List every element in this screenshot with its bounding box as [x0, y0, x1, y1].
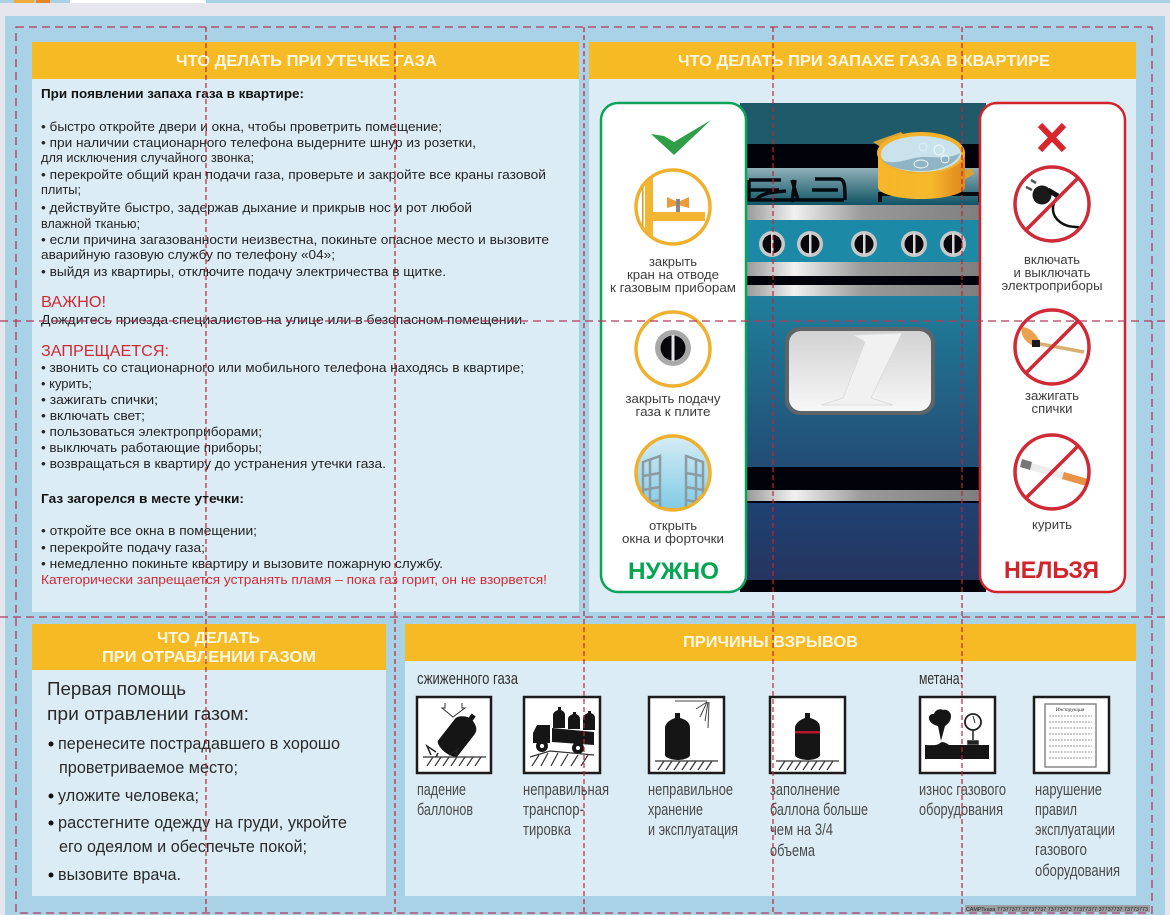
icon: stove knob [636, 312, 710, 386]
text block: important: Дождитесь приезда специалистов на улице или в безопасном помещении. [41, 312, 526, 327]
text block: first aid: уложите человека; [58, 787, 199, 805]
label: overfilling: объема [770, 841, 815, 860]
knobs [759, 231, 966, 257]
text block: forbidden: • включать свет; [41, 408, 145, 423]
icon: worn gas equipment [920, 697, 995, 773]
text block: first aid [47, 678, 347, 884]
label: worn equipment: износ газового [919, 780, 1006, 799]
icon: no smoking [1015, 435, 1089, 509]
label: worn equipment [919, 780, 1006, 819]
label: worn equipment: оборудования [919, 800, 1003, 819]
label: rule violation [1035, 780, 1120, 880]
label: falling cylinders: баллонов [417, 800, 473, 819]
label: electric appliances: и выключать [1014, 266, 1091, 280]
pot [873, 132, 974, 199]
card: allowed actions [601, 103, 746, 592]
label: close stove gas: закрыть подачу [626, 392, 721, 406]
label: open window: открыть [649, 519, 697, 533]
subheading: liquefied gas: сжиженного газа [417, 670, 519, 688]
text block: leak instructions: влажной тканью; [41, 216, 140, 231]
icon: instruction document [1034, 697, 1109, 773]
text block: leak instructions: • выйдя из квартиры, отключите подачу электричества в щитке. [41, 264, 446, 279]
label: electric appliances [1002, 253, 1102, 293]
text block: important: ВАЖНО! [41, 294, 106, 311]
label: forbidden: НЕЛЬЗЯ [1004, 557, 1099, 584]
panel: gas leak [32, 42, 579, 612]
label: needed: НУЖНО [628, 558, 719, 585]
icon: no matches [1015, 310, 1089, 384]
label: improper storage [648, 780, 738, 839]
label: overfilling: чем на 3/4 [770, 820, 833, 839]
text block: leak instructions: • перекройте общий кран подачи газа, проверьте и закройте все краны газовой [41, 167, 546, 182]
heading: explosion causes: ПРИЧИНЫ ВЗРЫВОВ [683, 634, 858, 651]
top strip [0, 0, 1170, 3]
text block: first aid: вызовите врача. [58, 866, 181, 884]
icon: red cross [1040, 125, 1064, 150]
icon: instruction document: Инструкция [1055, 707, 1085, 713]
text block: forbidden: • выключать работающие приборы; [41, 440, 262, 455]
label: rule violation: нарушение [1035, 780, 1102, 799]
crop frame: vertical cut lines [206, 27, 962, 913]
heading: gas poisoning [102, 630, 316, 666]
panel: gas poisoning [32, 624, 386, 896]
text block: gas on fire: Газ загорелся в месте утечки: [41, 491, 244, 506]
label: improper transport: транспор- [523, 800, 584, 819]
footer imprint strip: САМРТкаха 77377377 37737737 73773773 77377377 37737737 73773773 [966, 907, 1148, 913]
illustration: stove [740, 103, 986, 592]
label: rule violation: оборудования [1035, 861, 1120, 880]
text block: first aid: перенесите пострадавшего в хорошо [58, 735, 340, 753]
text block: leak instructions: плиты; [41, 182, 81, 197]
label: improper transport [523, 780, 609, 839]
oven window [785, 327, 935, 415]
heading: gas smell: ЧТО ДЕЛАТЬ ПРИ ЗАПАХЕ ГАЗА В КВАРТИРЕ [678, 53, 1050, 70]
label: close stove gas: газа к плите [636, 405, 710, 419]
label: smoking: курить [1032, 518, 1072, 532]
label: electric appliances: электроприборы [1002, 279, 1102, 293]
text block: leak instructions: • при наличии стационарного телефона выдерните шнур из розетки, [41, 135, 476, 150]
icon: falling cylinder [417, 697, 491, 773]
icon: improper storage [649, 697, 724, 773]
label: matches: спички [1032, 402, 1072, 416]
label: close valve: кран на отводе [627, 268, 719, 282]
label: improper storage: неправильное [648, 780, 733, 799]
icon: truck with cylinders [524, 697, 600, 773]
text block: forbidden: • пользоваться электроприборами; [41, 424, 262, 439]
label: overfilling: заполнение [770, 780, 840, 799]
label: matches: зажигать [1025, 389, 1079, 403]
text block: gas on fire: • откройте все окна в помещении; [41, 523, 257, 538]
text block: leak instructions: • действуйте быстро, задержав дыхание и прикрыв нос и рот любой [41, 200, 472, 215]
label: close valve: к газовым приборам [610, 281, 736, 295]
label: open window [622, 519, 724, 546]
panel: explosion causes [405, 624, 1136, 896]
label: electric appliances: включать [1024, 253, 1080, 267]
label: falling cylinders [417, 780, 473, 819]
icon: open window [636, 436, 710, 516]
label: rule violation: эксплуатации [1035, 820, 1115, 839]
text block: forbidden: • зажигать спички; [41, 392, 158, 407]
text block: leak instructions: При появлении запаха газа в квартире: [41, 86, 304, 101]
label: close valve: закрыть [649, 255, 697, 269]
text block: first aid: при отравлении газом: [47, 703, 249, 724]
label: improper storage: хранение [648, 800, 703, 819]
text block: leak instructions [41, 86, 549, 279]
text block: leak instructions: аварийную газовую службу по телефону «04»; [41, 247, 335, 262]
text block: first aid: его одеялом и обеспечьте покой; [59, 838, 307, 856]
label: falling cylinders: падение [417, 780, 466, 799]
text block: important [41, 294, 526, 327]
text block: forbidden: • возвращаться в квартиру до устранения утечки газа. [41, 456, 386, 471]
text block: leak instructions: для исключения случайного звонка; [41, 150, 254, 165]
subheading: methane: метана: [919, 670, 963, 688]
icon: check mark [651, 120, 711, 155]
label: matches [1025, 389, 1079, 416]
heading: gas poisoning: ПРИ ОТРАВЛЕНИИ ГАЗОМ [102, 649, 316, 666]
icon: gas valve [636, 170, 710, 244]
text block: first aid: проветриваемое место; [59, 759, 238, 777]
label: open window: окна и форточки [622, 532, 724, 546]
icon: no plug [1015, 167, 1089, 241]
text block: forbidden: ЗАПРЕЩАЕТСЯ: [41, 343, 169, 360]
panel: gas smell [589, 42, 1136, 612]
text block: first aid: Первая помощь [47, 678, 186, 699]
text block: forbidden: • звонить со стационарного или мобильного телефона находясь в квартире; [41, 360, 524, 375]
label: improper transport: неправильная [523, 780, 609, 799]
text block: gas on fire: • немедленно покиньте квартиру и вызовите пожарную службу. [41, 556, 443, 571]
heading: gas poisoning: ЧТО ДЕЛАТЬ [157, 630, 260, 647]
text block: gas on fire: Категорически запрещается устранять пламя – пока газ горит, он не взорвется! [41, 572, 547, 587]
label: rule violation: газового [1035, 840, 1087, 859]
text block: forbidden [41, 343, 524, 471]
text block: gas on fire: • перекройте подачу газа; [41, 540, 205, 555]
card: forbidden actions [980, 103, 1125, 592]
label: close valve [610, 255, 736, 295]
label: overfilling: баллона больше [770, 800, 868, 819]
text block: forbidden: • курить; [41, 376, 92, 391]
label: improper storage: и эксплуатация [648, 820, 738, 839]
label: rule violation: правил [1035, 800, 1077, 819]
text block: gas on fire [41, 491, 547, 587]
label: improper transport: тировка [523, 820, 571, 839]
heading: gas leak: ЧТО ДЕЛАТЬ ПРИ УТЕЧКЕ ГАЗА [176, 53, 437, 70]
label: overfilling [770, 780, 868, 860]
text block: first aid: расстегните одежду на груди, укройте [58, 814, 347, 832]
text block: leak instructions: • быстро откройте двери и окна, чтобы проветрить помещение; [41, 119, 442, 134]
text block: leak instructions: • если причина загазованности неизвестна, покиньте опасное место и вызовите [41, 232, 549, 247]
icon: overfilled cylinder [770, 697, 845, 773]
label: close stove gas [626, 392, 721, 419]
